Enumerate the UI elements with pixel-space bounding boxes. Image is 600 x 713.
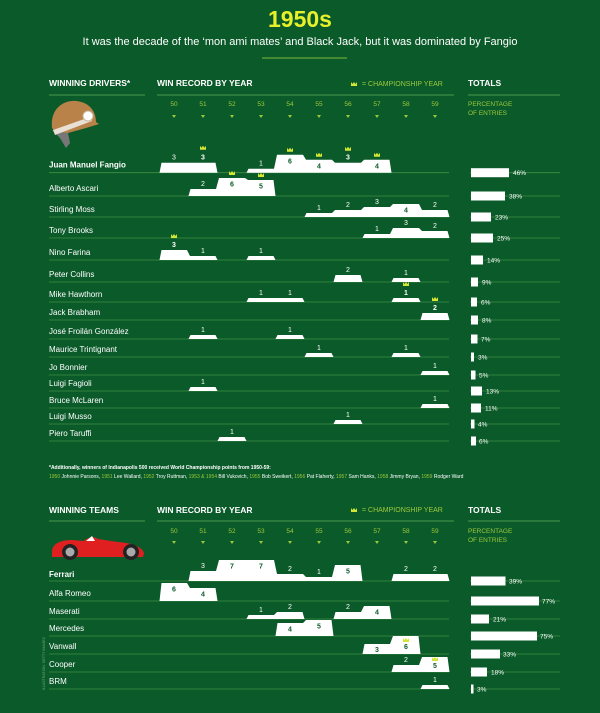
row: Maserati <box>49 604 449 619</box>
row: Maserati: 2 <box>346 604 350 611</box>
row: Fagioli <box>49 379 449 391</box>
row: Farina <box>49 234 449 260</box>
drivers header: WIN RECORD BY YEAR <box>157 78 253 88</box>
title: 1950s <box>268 6 332 32</box>
row: Brabham: Jack Brabham <box>49 308 100 317</box>
row: Bonnier: Jo Bonnier <box>49 363 88 372</box>
row: Hawthorn: 1 <box>288 290 292 297</box>
row: Musso <box>49 412 449 424</box>
row: Fangio: 6 <box>288 159 292 166</box>
row: Cooper: Cooper <box>49 660 76 669</box>
row: Trintignant: 1 <box>317 345 321 352</box>
row: Ferrari: 1 <box>317 569 321 576</box>
row: Alfa Romeo: Alfa Romeo <box>49 589 91 598</box>
row: Mercedes: 4 <box>288 626 292 634</box>
driver totals: 8% <box>482 318 492 324</box>
row: Fagioli: Luigi Fagioli <box>49 379 92 388</box>
row: Farina: Nino Farina <box>49 248 91 257</box>
year axis: drivers: 54 <box>286 101 294 108</box>
icon: helmet <box>52 101 99 148</box>
row: Ferrari <box>49 560 450 581</box>
driver totals: 46% <box>513 170 526 177</box>
row: Trintignant: Maurice Trintignant <box>49 345 118 354</box>
row: Taruffi: Piero Taruffi <box>49 429 92 438</box>
driver totals: 13% <box>486 388 499 396</box>
year axis: drivers <box>170 101 439 118</box>
row: Brooks: 3 <box>404 220 408 227</box>
row: Brooks: 1 <box>375 226 379 233</box>
driver totals: 11% <box>485 406 498 412</box>
team totals: 33% <box>503 652 516 658</box>
row: Ferrari: Ferrari <box>49 570 74 579</box>
team totals: 18% <box>491 670 504 676</box>
row: Mercedes <box>49 620 449 636</box>
year axis: drivers: 56 <box>344 101 352 108</box>
row: McLaren: Bruce McLaren <box>49 396 103 405</box>
driver totals: 3% <box>478 354 488 362</box>
row: Mercedes: 5 <box>317 624 321 630</box>
row: Moss: 4 <box>404 208 408 214</box>
row: BRM: 1 <box>433 677 437 684</box>
row: Fangio: Juan Manuel Fangio <box>49 161 126 170</box>
driver totals: 14% <box>487 258 500 264</box>
driver totals: 9% <box>482 280 492 286</box>
row: Ascari: 5 <box>259 184 263 190</box>
row: Bonnier: 1 <box>433 363 437 370</box>
year axis: drivers: 53 <box>257 101 265 108</box>
drivers header: PERCENTAGE <box>468 101 513 108</box>
row: Moss: 2 <box>346 202 350 209</box>
row: Musso: 1 <box>346 412 350 419</box>
row: Maserati: 1 <box>259 607 263 614</box>
driver rows <box>49 146 450 441</box>
year axis: teams: 57 <box>373 528 381 535</box>
row: Trintignant: 1 <box>404 345 408 352</box>
row: Alfa Romeo <box>49 583 449 601</box>
teams header <box>49 505 560 544</box>
row: Cooper: 5 <box>433 663 437 670</box>
row: BRM: BRM <box>49 677 67 686</box>
year axis: teams: 55 <box>315 528 323 535</box>
drivers header <box>49 78 560 117</box>
row: Taruffi: 1 <box>230 429 234 436</box>
row: McLaren <box>49 396 450 408</box>
row: Hawthorn: 1 <box>259 290 263 297</box>
row: Gonzalez: 1 <box>201 327 205 334</box>
row: Moss: Stirling Moss <box>49 205 95 214</box>
year axis: drivers: 55 <box>315 101 323 108</box>
team totals: 39% <box>509 578 522 586</box>
row: McLaren: 1 <box>433 396 437 403</box>
row: Ferrari: 2 <box>433 566 437 573</box>
teams header: = CHAMPIONSHIP YEAR <box>362 507 443 514</box>
year axis: drivers: 52 <box>228 101 236 108</box>
team rows <box>49 560 450 689</box>
row: Gonzalez: José Froilán González <box>49 327 129 336</box>
row: Brooks <box>49 220 450 238</box>
year axis: teams: 51 <box>199 528 207 535</box>
row: Maserati: 4 <box>375 610 379 616</box>
year axis: drivers: 51 <box>199 101 207 108</box>
team totals <box>470 576 560 694</box>
row: Ascari: Alberto Ascari <box>49 184 99 193</box>
row: Vanwall <box>49 636 449 654</box>
row: Ferrari: 7 <box>230 564 234 570</box>
row: Ferrari: 2 <box>288 566 292 573</box>
row: Trintignant <box>49 345 449 357</box>
year axis: teams: 56 <box>344 528 352 535</box>
year axis: teams <box>170 528 439 544</box>
team totals: 3% <box>477 686 487 694</box>
row: Moss: 1 <box>317 205 321 212</box>
row: Brabham <box>49 297 450 320</box>
driver totals: 7% <box>481 336 491 344</box>
row: Ascari: 6 <box>230 182 234 188</box>
row: Maserati: Maserati <box>49 607 80 616</box>
team totals: 75% <box>540 634 553 640</box>
driver totals: 25% <box>497 236 510 242</box>
footnote: *Additionally, winners of Indianapolis 500 received World Championship points from 1950-59: <box>49 465 271 471</box>
year axis: drivers: 57 <box>373 101 381 108</box>
subtitle: It was the decade of the ‘mon ami mates’ and Black Jack, but it was dominated by Fangio <box>83 36 517 48</box>
row: Ferrari: 2 <box>404 566 408 573</box>
teams header: PERCENTAGE <box>468 528 513 535</box>
row: Ferrari: 5 <box>346 568 350 576</box>
year axis: teams: 54 <box>286 528 294 535</box>
row: Farina: 1 <box>259 248 263 255</box>
row: BRM <box>49 677 450 689</box>
row: Brooks: Tony Brooks <box>49 226 93 235</box>
row: Ferrari: 3 <box>201 563 205 570</box>
row: Moss: 3 <box>375 199 379 206</box>
teams header: OF ENTRIES <box>468 537 508 544</box>
year axis: teams: 53 <box>257 528 265 535</box>
row: Farina: 1 <box>201 248 205 255</box>
row: Collins: 1 <box>404 270 408 277</box>
row: Fangio: 4 <box>375 164 379 171</box>
row: Bonnier <box>49 363 450 375</box>
row: Alfa Romeo: 4 <box>201 592 205 598</box>
year axis: drivers: 59 <box>431 101 439 108</box>
year axis: teams: 50 <box>170 528 178 535</box>
row: Farina: 3 <box>172 242 176 249</box>
row: Ascari <box>49 171 449 196</box>
footnote <box>49 465 464 480</box>
row: Musso: Luigi Musso <box>49 412 92 421</box>
driver totals <box>470 168 560 445</box>
driver totals: 6% <box>479 438 489 446</box>
row: Cooper: 2 <box>404 657 408 664</box>
row: Ferrari: 7 <box>259 564 263 570</box>
driver totals: 4% <box>478 422 488 428</box>
row: Ascari: 2 <box>201 181 205 188</box>
row: Alfa Romeo: 6 <box>172 586 176 594</box>
year axis: teams: 58 <box>402 528 410 535</box>
team totals: 21% <box>493 616 506 624</box>
row: Fangio: 3 <box>172 155 176 162</box>
drivers header: TOTALS <box>468 78 502 88</box>
row: Cooper <box>49 657 450 672</box>
row: Fagioli: 1 <box>201 379 205 386</box>
year axis: drivers: 58 <box>402 101 410 108</box>
driver totals: 6% <box>481 300 491 306</box>
row: Fangio <box>49 146 449 173</box>
row: Vanwall: Vanwall <box>49 642 77 651</box>
driver totals: 23% <box>495 214 508 222</box>
row: Vanwall: 3 <box>375 647 379 654</box>
row: Taruffi <box>49 429 449 441</box>
row: Brabham: 2 <box>433 305 437 312</box>
row: Hawthorn: 1 <box>404 290 408 297</box>
year axis: drivers: 50 <box>170 101 178 108</box>
icon: red racing car <box>52 536 144 560</box>
drivers header: = CHAMPIONSHIP YEAR <box>362 81 443 88</box>
row: Maserati: 2 <box>288 604 292 611</box>
row: Collins: 2 <box>346 267 350 274</box>
row: Brooks: 2 <box>433 223 437 230</box>
row: Fangio: 3 <box>346 155 350 162</box>
row: Gonzalez: 1 <box>288 327 292 334</box>
drivers header: WINNING DRIVERS* <box>49 78 131 88</box>
row: Vanwall: 6 <box>404 644 408 651</box>
row: Hawthorn <box>49 282 449 302</box>
row: Collins: Peter Collins <box>49 270 94 279</box>
row: Fangio: 4 <box>317 164 321 171</box>
year axis: teams: 52 <box>228 528 236 535</box>
year axis: teams: 59 <box>431 528 439 535</box>
driver totals: 5% <box>479 372 489 380</box>
credit: ILLUSTRATION: GETTY IMAGES <box>42 636 46 690</box>
driver totals: 38% <box>509 194 522 200</box>
row: Moss <box>49 199 450 217</box>
row: Mercedes: Mercedes <box>49 624 84 633</box>
row: Collins <box>49 267 449 282</box>
team totals: 77% <box>542 598 555 606</box>
drivers header: OF ENTRIES <box>468 110 508 117</box>
teams header: WIN RECORD BY YEAR <box>157 505 253 515</box>
row: Fangio: 1 <box>259 161 263 168</box>
teams header: WINNING TEAMS <box>49 505 119 515</box>
row: Moss: 2 <box>433 202 437 209</box>
row: Fangio: 3 <box>201 155 205 162</box>
row: Hawthorn: Mike Hawthorn <box>49 290 102 299</box>
teams header: TOTALS <box>468 505 502 515</box>
footnote: 1950 Johnnie Parsons, 1951 Lee Wallard, 1952 Troy Ruttman, 1953 & 1954 Bill Vukovich, 1955 Bob Sweikert, 1956 Pat Flaherty, 1957 Sam Hanks, 1958 Jimmy Bryan, 1959 Rodger Ward <box>49 474 464 480</box>
row: Gonzalez <box>49 327 449 339</box>
